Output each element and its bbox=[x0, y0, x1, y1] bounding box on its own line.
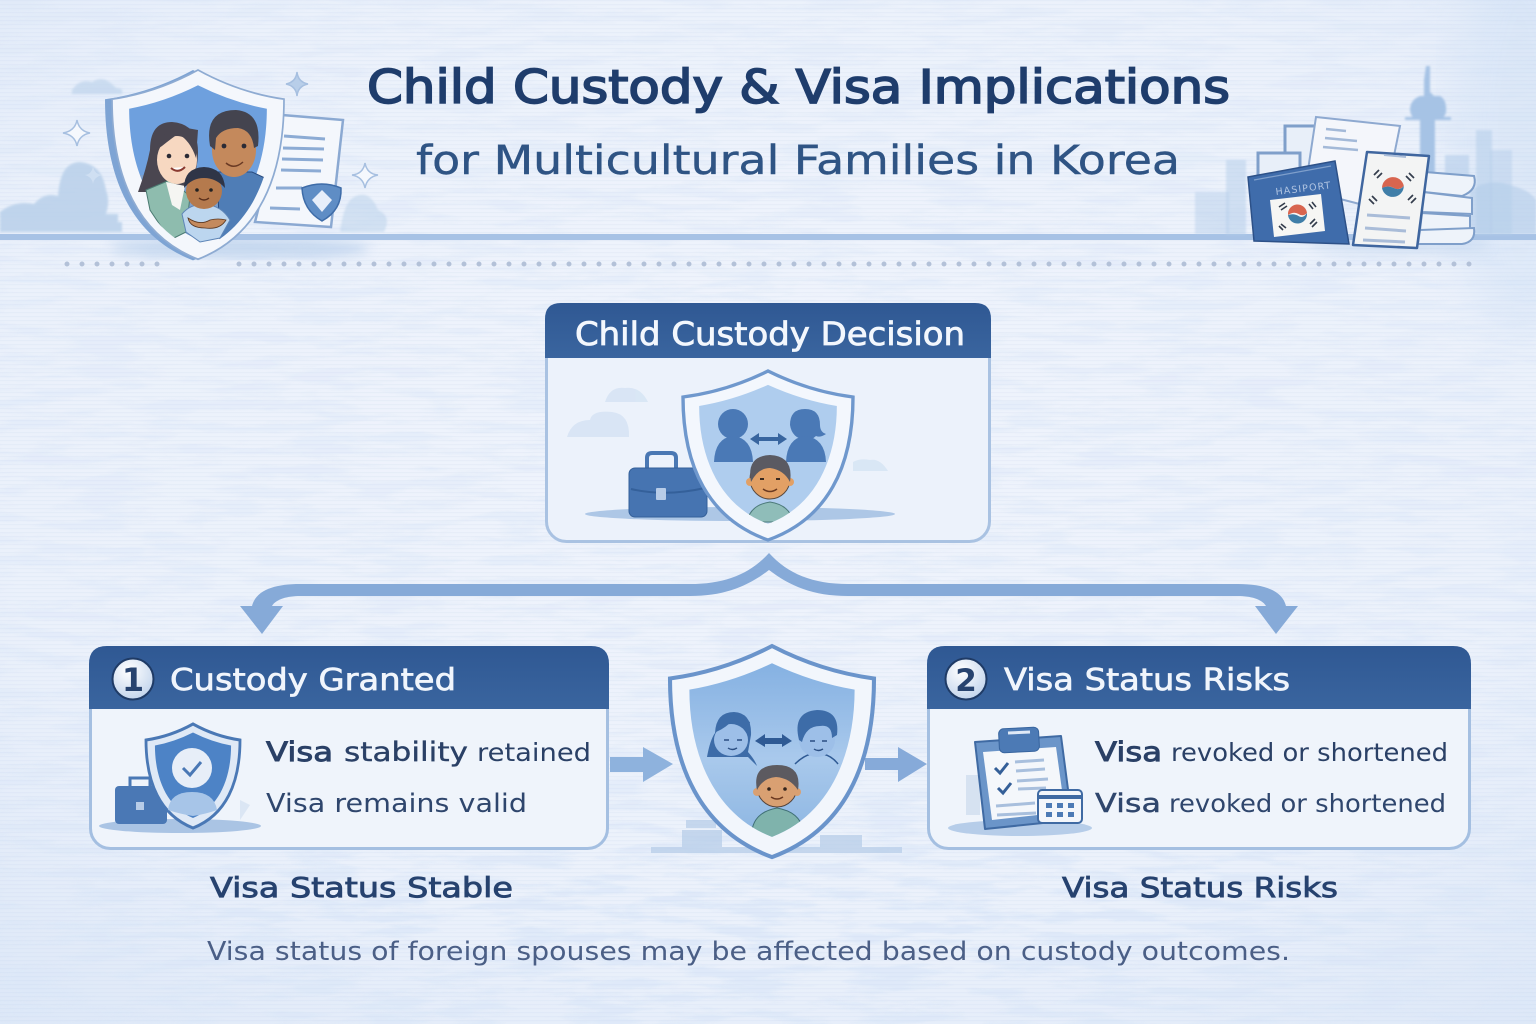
number badge 1 bbox=[112, 658, 154, 700]
panel header bbox=[89, 646, 609, 709]
family illustration bbox=[138, 110, 278, 242]
icon: custody shield bbox=[683, 371, 853, 540]
clouds bbox=[567, 388, 888, 471]
icon: certificate document bbox=[255, 115, 343, 227]
tablet behind bbox=[1285, 126, 1325, 200]
risk line 1: revoked or shortened bbox=[1171, 738, 1448, 767]
left landscape bbox=[0, 79, 387, 232]
arrow: left to centre bbox=[610, 747, 673, 782]
number badge 2 bbox=[946, 658, 986, 700]
footer note: Visa status of foreign spouses may be affected based on custody outcomes. bbox=[207, 937, 1290, 967]
title bbox=[367, 60, 1230, 184]
icon: shield with briefcase bbox=[99, 724, 261, 833]
risk line 1: Visa bbox=[1095, 737, 1162, 768]
panel header bbox=[927, 646, 1471, 709]
panel heading: Child Custody Decision bbox=[575, 315, 965, 353]
paper sheet bbox=[1305, 117, 1400, 210]
arrow between parents bbox=[750, 433, 787, 445]
phone with flag bbox=[1353, 152, 1429, 248]
risk line 2: Visa bbox=[1095, 789, 1161, 819]
label: visa status stable: Visa Status Stable bbox=[210, 871, 513, 904]
icon: family shield bbox=[105, 70, 343, 260]
parent face right bbox=[795, 710, 838, 764]
passport bbox=[1248, 161, 1349, 244]
arrow: centre to right bbox=[865, 747, 927, 782]
number badge 2: 2 bbox=[955, 663, 977, 699]
icon: clipboard with calendar bbox=[948, 727, 1092, 836]
sparkles bbox=[63, 72, 378, 188]
number badge 1: 1 bbox=[122, 661, 144, 699]
benefit line 1 bbox=[266, 737, 591, 768]
icon: passport and documents bbox=[1248, 117, 1475, 248]
benefit line 2: Visa remains valid bbox=[266, 789, 527, 819]
passport flag bbox=[1270, 194, 1325, 237]
parent silhouette right bbox=[786, 409, 826, 462]
benefit line 1: Visa bbox=[266, 737, 333, 768]
panel header bbox=[545, 303, 991, 358]
risk line 2: revoked or shortened bbox=[1169, 789, 1446, 818]
panel: custody granted bbox=[89, 646, 609, 848]
right skyline bbox=[1195, 66, 1536, 235]
book stack bbox=[1418, 172, 1475, 244]
panel: child custody decision bbox=[545, 303, 991, 542]
benefit line 1: retained bbox=[477, 738, 591, 767]
ground shadow bbox=[585, 507, 895, 521]
main heading: Child Custody & Visa Implications bbox=[367, 60, 1230, 114]
dotted divider bbox=[67, 262, 1478, 266]
panel heading: Visa Status Risks bbox=[1004, 663, 1290, 698]
horizon wash bbox=[110, 238, 1490, 258]
benefit line 1: stability bbox=[344, 737, 468, 768]
parent face left bbox=[707, 712, 757, 766]
panel body bbox=[546, 304, 990, 542]
label: visa status risks: Visa Status Risks bbox=[1062, 871, 1338, 904]
second tablet bbox=[1258, 153, 1300, 190]
child bbox=[752, 765, 801, 837]
parent silhouette left bbox=[714, 409, 753, 462]
baby bbox=[182, 204, 230, 242]
shield frame bbox=[105, 70, 284, 260]
passport: HASIPORT bbox=[1275, 180, 1332, 198]
woman bbox=[138, 122, 198, 192]
icon: briefcase bbox=[629, 453, 707, 517]
branching arrow bbox=[240, 553, 1298, 634]
subheading: for Multicultural Families in Korea bbox=[416, 138, 1180, 184]
arrow between parents bbox=[755, 734, 792, 747]
horizon line bbox=[0, 234, 1536, 240]
panel body bbox=[90, 648, 608, 848]
man bbox=[218, 172, 264, 240]
icon: central shield bbox=[670, 646, 874, 857]
panel heading: Custody Granted bbox=[170, 663, 456, 698]
panel: visa status risks bbox=[927, 646, 1471, 848]
child bbox=[746, 455, 794, 522]
ground objects under shield bbox=[651, 820, 902, 853]
panel body bbox=[928, 648, 1470, 848]
